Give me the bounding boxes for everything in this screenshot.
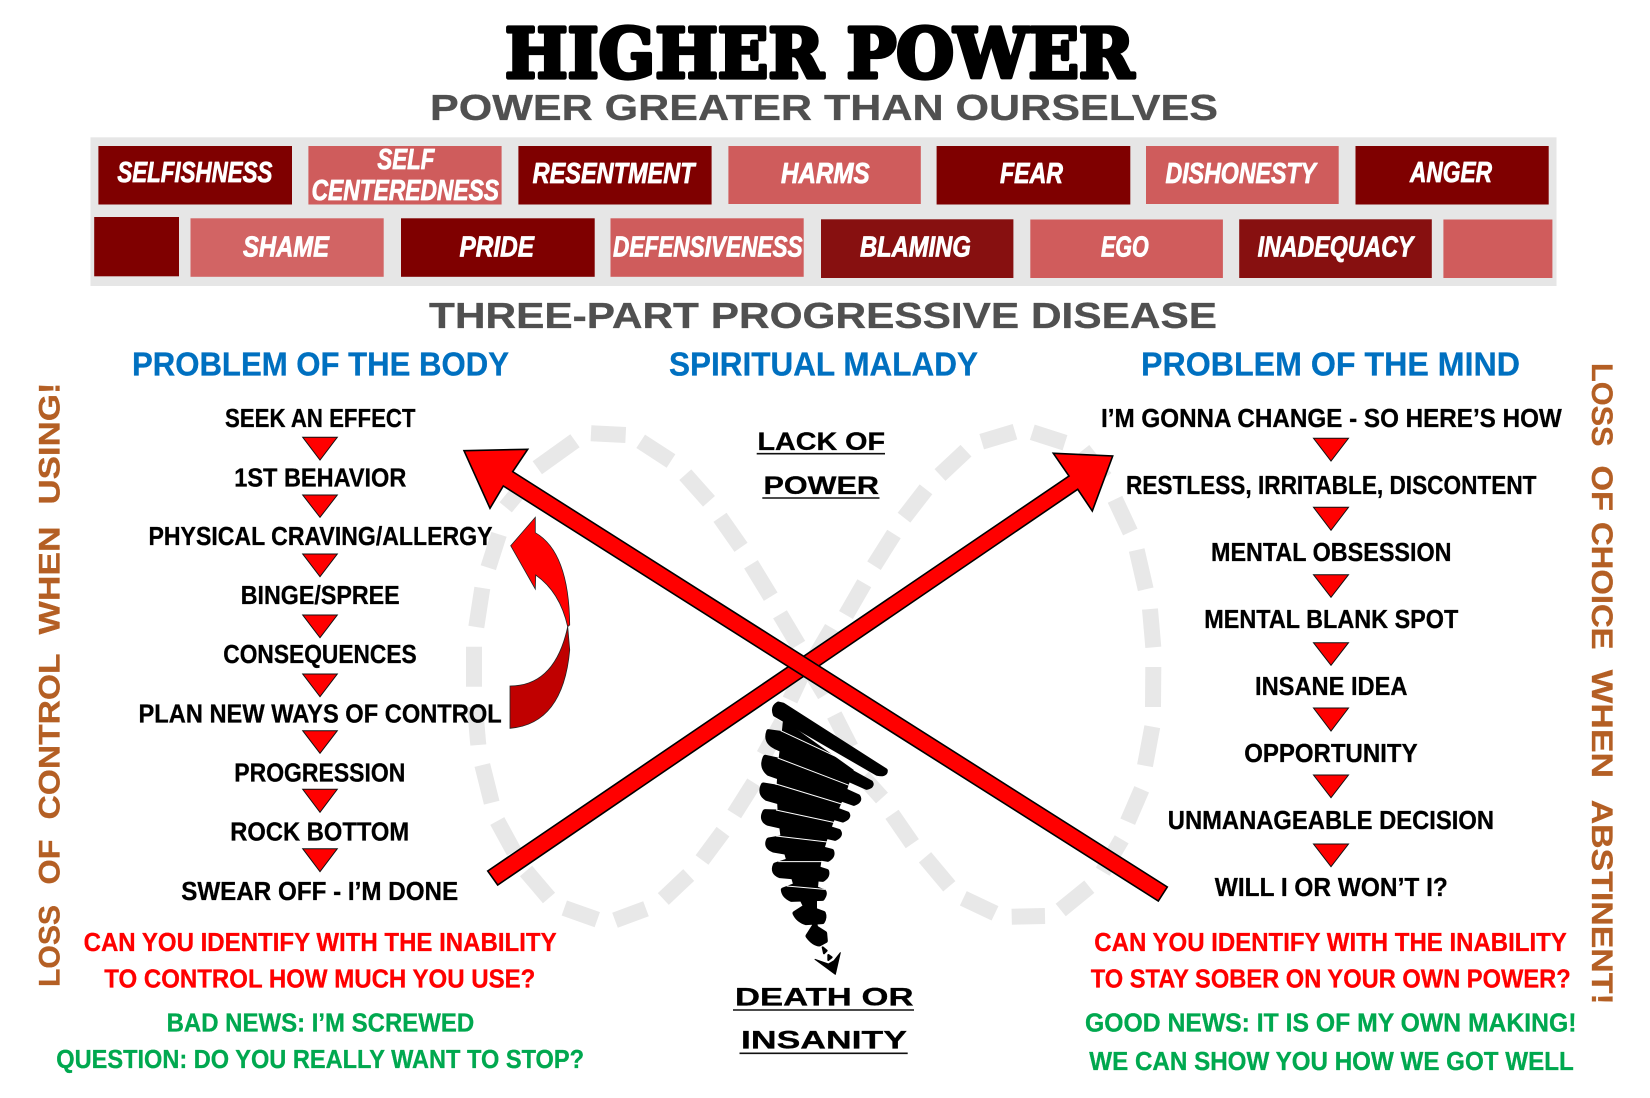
callout: mind question: TO STAY SOBER ON YOUR OWN POWER? (1091, 965, 1571, 993)
list: problem of the body steps: PROGRESSION (234, 760, 405, 788)
callout: body bad news: BAD NEWS: I’M SCREWED (167, 1010, 474, 1038)
side label: loss of choice: WHEN (1585, 670, 1618, 778)
text: lack of power (757, 428, 885, 500)
brick: dishonesty: DISHONESTY (1166, 158, 1318, 190)
callout: body bad news (56, 1010, 584, 1074)
brick: resentment (518, 146, 712, 204)
side label: loss of control: OF (33, 840, 66, 884)
heading: problem of the body: PROBLEM OF THE BODY (132, 346, 509, 382)
callout: body question: CAN YOU IDENTIFY WITH THE INABILITY (84, 929, 557, 957)
list: problem of the body steps: SEEK AN EFFECT (225, 405, 416, 433)
side label: loss of choice: ABSTINENT! (1585, 800, 1618, 1005)
list: problem of the body steps: PLAN NEW WAYS OF CONTROL (138, 701, 502, 729)
panel: brick wall of character defects (90, 137, 1556, 286)
arrow: mind to body diagonal (464, 449, 1167, 901)
list: problem of the mind steps: MENTAL BLANK SPOT (1204, 606, 1459, 634)
heading: three-part progressive disease: THREE-PART PROGRESSIVE DISEASE (429, 295, 1217, 336)
icon: tornado (762, 704, 885, 974)
callout: mind question: CAN YOU IDENTIFY WITH THE INABILITY (1094, 929, 1567, 957)
side label: loss of control: CONTROL (33, 654, 66, 820)
title: HIGHER POWER (505, 14, 1134, 94)
list: problem of the mind steps (1101, 405, 1563, 902)
brick: blank light (1443, 220, 1552, 278)
list: problem of the mind steps: RESTLESS, IRRITABLE, DISCONTENT (1126, 472, 1537, 500)
icon: down arrows mind (1314, 438, 1348, 867)
arrow: curved relapse loop (510, 517, 570, 728)
callout: mind question (1091, 929, 1571, 993)
brick: harms (728, 146, 921, 204)
list: problem of the mind steps: OPPORTUNITY (1244, 740, 1418, 768)
callout: mind good news (1085, 1010, 1576, 1076)
heading: spiritual malady: SPIRITUAL MALADY (669, 346, 978, 382)
side label: loss of choice: OF (1585, 466, 1618, 511)
list: problem of the body steps: SWEAR OFF - I’M DONE (181, 878, 458, 906)
brick: self centeredness: CENTEREDNESS (312, 175, 500, 207)
heading: problem of the mind: PROBLEM OF THE MIND (1141, 346, 1520, 382)
side label: loss of control: LOSS (33, 905, 66, 987)
brick: resentment: RESENTMENT (533, 158, 696, 190)
dashed infinity loop (474, 432, 1153, 920)
text: death or insanity: DEATH OR (735, 984, 914, 1012)
callout: mind good news: WE CAN SHOW YOU HOW WE GOT WELL (1089, 1048, 1574, 1076)
brick: dishonesty (1146, 146, 1339, 204)
brick: defensiveness: DEFENSIVENESS (613, 232, 803, 264)
list: problem of the mind steps: INSANE IDEA (1255, 673, 1408, 701)
side label: loss of choice: CHOICE (1585, 522, 1618, 650)
brick: self centeredness (308, 144, 502, 207)
brick: fear: FEAR (1000, 158, 1063, 190)
brick: self centeredness: SELF (377, 144, 435, 176)
brick: shame (190, 218, 384, 277)
side label: loss of choice: LOSS (1585, 363, 1618, 446)
brick: shame: SHAME (243, 232, 330, 264)
text: lack of power: LACK OF (758, 428, 885, 456)
brick: harms: HARMS (781, 158, 870, 190)
list: problem of the mind steps: WILL I OR WON’T I? (1215, 874, 1448, 902)
list: problem of the mind steps: UNMANAGEABLE DECISION (1168, 807, 1494, 835)
side label: loss of choice (1585, 363, 1618, 1005)
list: problem of the body steps: BINGE/SPREE (241, 582, 400, 610)
callout: body question (84, 929, 557, 993)
callout: body question: TO CONTROL HOW MUCH YOU USE? (104, 965, 535, 993)
icon: down arrows body (303, 437, 337, 872)
side label: loss of control: WHEN (33, 527, 66, 634)
arrow: body to mind diagonal (488, 453, 1113, 885)
brick: pride (401, 218, 595, 277)
list: problem of the body steps: ROCK BOTTOM (230, 819, 409, 847)
text: death or insanity (733, 984, 914, 1055)
callout: body bad news: QUESTION: DO YOU REALLY WANT TO STOP? (56, 1046, 584, 1074)
brick: ego: EGO (1101, 232, 1149, 264)
side label: loss of control (33, 382, 66, 987)
brick: pride: PRIDE (460, 232, 535, 264)
text: lack of power: POWER (764, 472, 879, 500)
list: problem of the mind steps: I’M GONNA CHANGE - SO HERE’S HOW (1101, 405, 1563, 433)
brick: defensiveness (610, 218, 804, 277)
list: problem of the body steps: CONSEQUENCES (223, 641, 417, 669)
side label: loss of control: USING! (33, 382, 66, 504)
list: problem of the mind steps: MENTAL OBSESSION (1211, 539, 1452, 567)
brick: anger (1356, 146, 1549, 204)
brick: blaming: BLAMING (860, 232, 971, 264)
brick: ego (1030, 220, 1223, 278)
subtitle: POWER GREATER THAN OURSELVES (430, 87, 1218, 128)
brick: fear (937, 146, 1130, 204)
brick: blaming (821, 219, 1013, 278)
list: problem of the body steps (138, 405, 502, 906)
brick: inadequacy (1239, 219, 1432, 278)
brick: inadequacy: INADEQUACY (1258, 232, 1416, 264)
brick: anger: ANGER (1409, 157, 1492, 189)
list: problem of the body steps: 1ST BEHAVIOR (234, 465, 406, 493)
brick: selfishness (98, 146, 292, 204)
brick: selfishness: SELFISHNESS (117, 157, 273, 189)
list: problem of the body steps: PHYSICAL CRAVING/ALLERGY (148, 523, 492, 551)
brick: blank dark (94, 217, 179, 276)
callout: mind good news: GOOD NEWS: IT IS OF MY OWN MAKING! (1085, 1010, 1576, 1038)
text: death or insanity: INSANITY (741, 1027, 907, 1055)
